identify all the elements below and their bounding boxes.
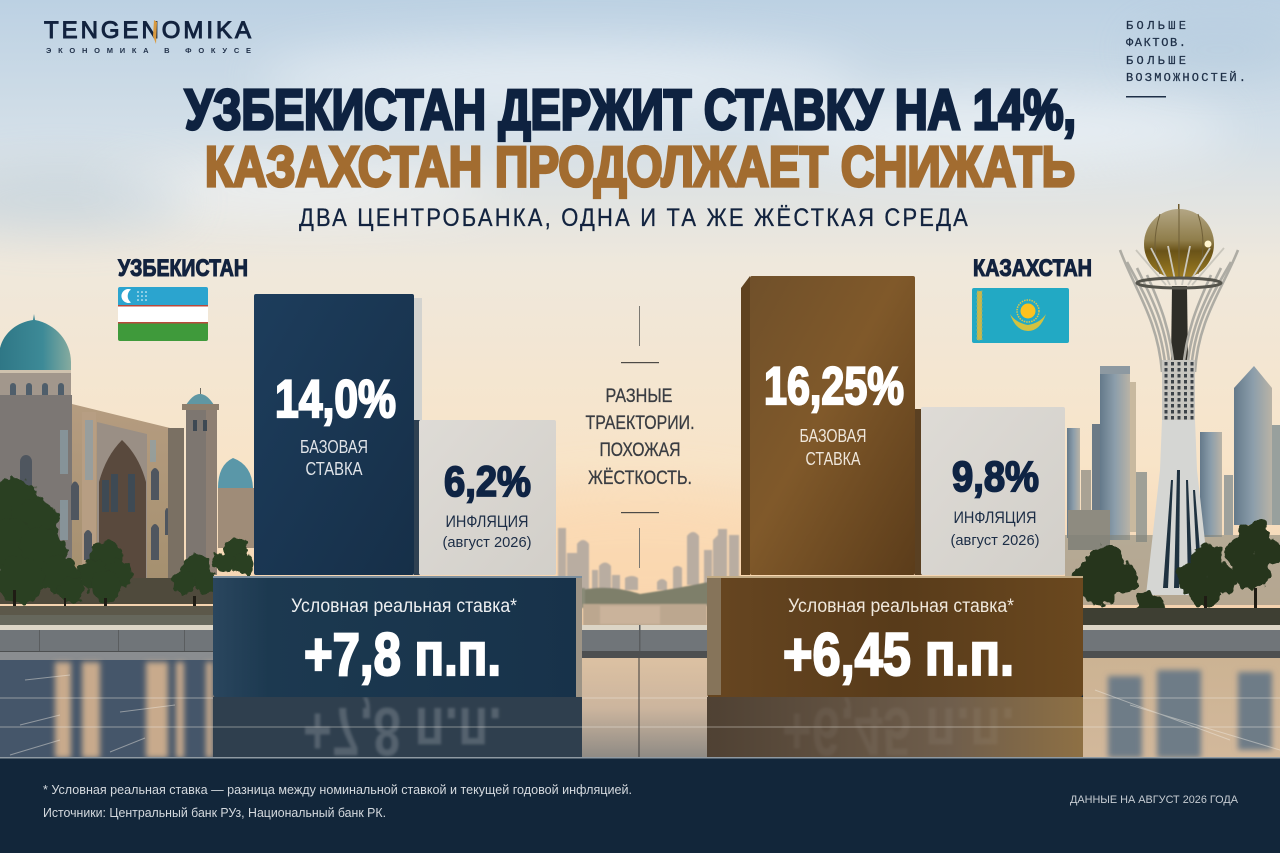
footnote and sources: * Условная реальная ставка — разница между номинальной ставкой и текущей годовой инфляцией.	[43, 783, 632, 797]
golden sphere	[1144, 209, 1214, 279]
background sky	[0, 0, 1280, 660]
tagline: ВОЗМОЖНОСТЕЙ.	[1126, 70, 1246, 85]
bar: inflation 9.8%: ИНФЛЯЦИЯ	[954, 508, 1036, 527]
center caption	[586, 306, 694, 568]
bar: base rate 16.25%: 16,25%	[764, 357, 904, 416]
title: КАЗАХСТАН ПРОДОЛЖАЕТ СНИЖАТЬ	[205, 135, 1075, 199]
center caption: РАЗНЫЕ	[606, 385, 672, 407]
footnote and sources: Источники: Центральный банк РУз, Национальный банк РК.	[43, 806, 386, 820]
title: УЗБЕКИСТАН ДЕРЖИТ СТАВКУ НА 14%,	[185, 78, 1076, 142]
footnote and sources	[43, 783, 632, 820]
data date: ДАННЫЕ НА АВГУСТ 2026 ГОДА	[1070, 794, 1239, 806]
panel: Uzbekistan bars	[213, 294, 582, 697]
tagline	[1126, 19, 1246, 98]
panel: Kazakhstan bars	[707, 276, 1083, 697]
center caption: ЖЁСТКОСТЬ.	[588, 467, 692, 489]
bar: inflation 6.2%	[414, 420, 556, 575]
bar: base rate 16.25%	[741, 276, 915, 575]
mirrored value reflection: +7,8 п.п.	[303, 693, 502, 771]
mirrored value reflection: +6,45 п.п.	[782, 693, 1015, 771]
left trees	[0, 479, 253, 625]
bar: inflation 6.2%: (август 2026)	[442, 534, 532, 551]
logo: ЭКОНОМИКА В ФОКУСЕ	[46, 46, 251, 55]
tagline: БОЛЬШЕ	[1126, 54, 1186, 68]
panel: Uzbekistan heading and flag	[118, 255, 248, 341]
reflective floor	[0, 652, 1280, 771]
bar: inflation 9.8%	[915, 407, 1065, 575]
lattice crown	[1120, 250, 1238, 372]
lattice shaft	[1162, 360, 1195, 422]
icon: flag of Uzbekistan	[118, 287, 208, 341]
minaret	[186, 394, 214, 405]
main dome	[0, 314, 71, 372]
block: real rate +7.8: +7,8 п.п.	[304, 621, 501, 688]
block: real rate +7.8	[213, 576, 582, 697]
logo: TENGENOMIKA	[44, 17, 251, 44]
panel: Kazakhstan heading and flag	[972, 255, 1092, 343]
bar: inflation 9.8%: 9,8%	[952, 453, 1039, 501]
bar: base rate 16.25%: СТАВКА	[806, 449, 860, 469]
block: real rate +6.45: Условная реальная ставка*	[788, 596, 1015, 617]
flared shaft	[1146, 420, 1211, 595]
Baiterek tower	[1120, 204, 1238, 595]
distant city skyline	[555, 528, 740, 626]
terrace balustrade	[0, 625, 1280, 658]
small dome	[218, 458, 253, 488]
title	[185, 78, 1076, 199]
tagline: БОЛЬШЕ	[1126, 19, 1186, 33]
tagline: ФАКТОВ.	[1126, 36, 1186, 50]
right skyline	[1065, 366, 1280, 605]
right trees	[1072, 520, 1280, 625]
bar: inflation 9.8%: (август 2026)	[950, 532, 1040, 549]
bar: base rate 14.0%	[254, 294, 422, 575]
footer	[0, 757, 1280, 853]
bar: base rate 16.25%: БАЗОВАЯ	[800, 426, 866, 446]
block: real rate +6.45: +6,45 п.п.	[783, 621, 1014, 688]
bar: inflation 6.2%: 6,2%	[444, 458, 531, 506]
block: real rate +6.45	[707, 576, 1083, 697]
icon: flag of Kazakhstan	[972, 288, 1069, 343]
block: real rate +7.8: Условная реальная ставка*	[291, 596, 518, 617]
panel: Uzbekistan heading and flag: УЗБЕКИСТАН	[118, 255, 248, 282]
reflection under blocks	[213, 697, 582, 758]
panel: Kazakhstan heading and flag: КАЗАХСТАН	[973, 255, 1092, 282]
center caption: ТРАЕКТОРИИ.	[586, 412, 694, 434]
bar: base rate 14.0%: 14,0%	[275, 370, 396, 429]
bar: inflation 6.2%: ИНФЛЯЦИЯ	[446, 512, 528, 531]
mirrored value reflection	[303, 693, 1015, 771]
center caption: ПОХОЖАЯ	[600, 439, 680, 461]
subtitle: ДВА ЦЕНТРОБАНКА, ОДНА И ТА ЖЕ ЖЁСТКАЯ СРЕДА	[299, 204, 970, 232]
main facade	[0, 395, 72, 595]
left landmark: madrasa with domes	[0, 314, 254, 604]
bar: base rate 14.0%: БАЗОВАЯ	[300, 437, 368, 457]
portal arch	[99, 440, 146, 578]
bar: base rate 14.0%: СТАВКА	[306, 459, 362, 479]
